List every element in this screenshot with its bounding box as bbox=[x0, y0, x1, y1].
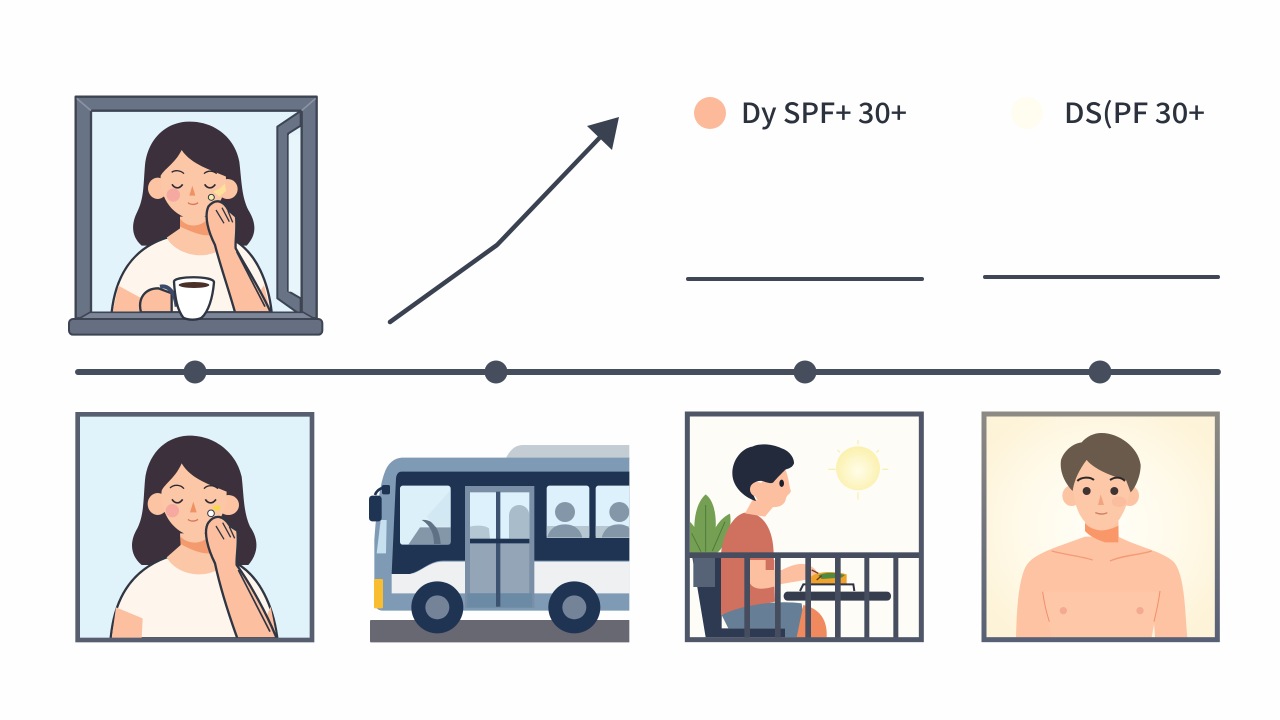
bus body bbox=[374, 458, 633, 611]
blank label rule right bbox=[985, 275, 1218, 279]
rear wheel bbox=[548, 581, 600, 633]
front wheel bbox=[411, 581, 463, 633]
blank label rule left bbox=[688, 277, 922, 281]
roof unit bbox=[506, 445, 633, 460]
legend: DS(PF 30+: DS(PF 30+ bbox=[1064, 92, 1205, 132]
raised arm and hand bbox=[207, 201, 271, 312]
hair bbox=[1061, 433, 1141, 492]
sun bbox=[828, 440, 888, 500]
neck bbox=[745, 498, 773, 517]
left hand holding mug bbox=[140, 288, 172, 312]
front window bbox=[400, 486, 451, 545]
coffee mug bbox=[160, 277, 214, 320]
headlight bbox=[374, 579, 383, 608]
white stripe bbox=[392, 562, 633, 593]
window sill bbox=[77, 312, 317, 320]
man body bbox=[721, 512, 775, 615]
neck bbox=[1085, 520, 1119, 537]
window glass bbox=[90, 110, 303, 313]
head bbox=[754, 468, 791, 507]
timeline bbox=[78, 360, 1218, 384]
plant bbox=[688, 494, 731, 553]
windshield side panel bbox=[377, 520, 387, 553]
woman figure bbox=[112, 122, 272, 312]
window frame bbox=[76, 97, 317, 318]
panel: man with sunburned torso bbox=[984, 414, 1217, 640]
legend: DS(PF 30+ bbox=[1011, 92, 1205, 132]
arrow: rising line bbox=[390, 117, 619, 322]
food plate bbox=[800, 570, 854, 591]
legend: Dy SPF+ 30+: Dy SPF+ 30+ bbox=[741, 92, 907, 132]
passenger windows bbox=[547, 486, 636, 538]
dark window band bbox=[392, 472, 633, 574]
door bbox=[465, 486, 534, 608]
chair bbox=[692, 553, 785, 637]
road bbox=[370, 620, 633, 642]
cream sparkle bbox=[213, 183, 226, 197]
ears bbox=[1062, 486, 1076, 506]
open window casement bbox=[277, 111, 301, 315]
torso bbox=[1016, 537, 1187, 637]
panel: woman at window with coffee bbox=[69, 97, 322, 335]
facial features bbox=[1077, 478, 1125, 481]
face bbox=[1073, 460, 1130, 530]
panel: woman applying sunscreen bbox=[78, 414, 312, 640]
panel: man eating on balcony bbox=[687, 414, 921, 640]
panel: bus bbox=[369, 445, 636, 642]
mirror bbox=[369, 485, 390, 521]
railing bbox=[688, 552, 921, 638]
table bbox=[784, 592, 891, 601]
